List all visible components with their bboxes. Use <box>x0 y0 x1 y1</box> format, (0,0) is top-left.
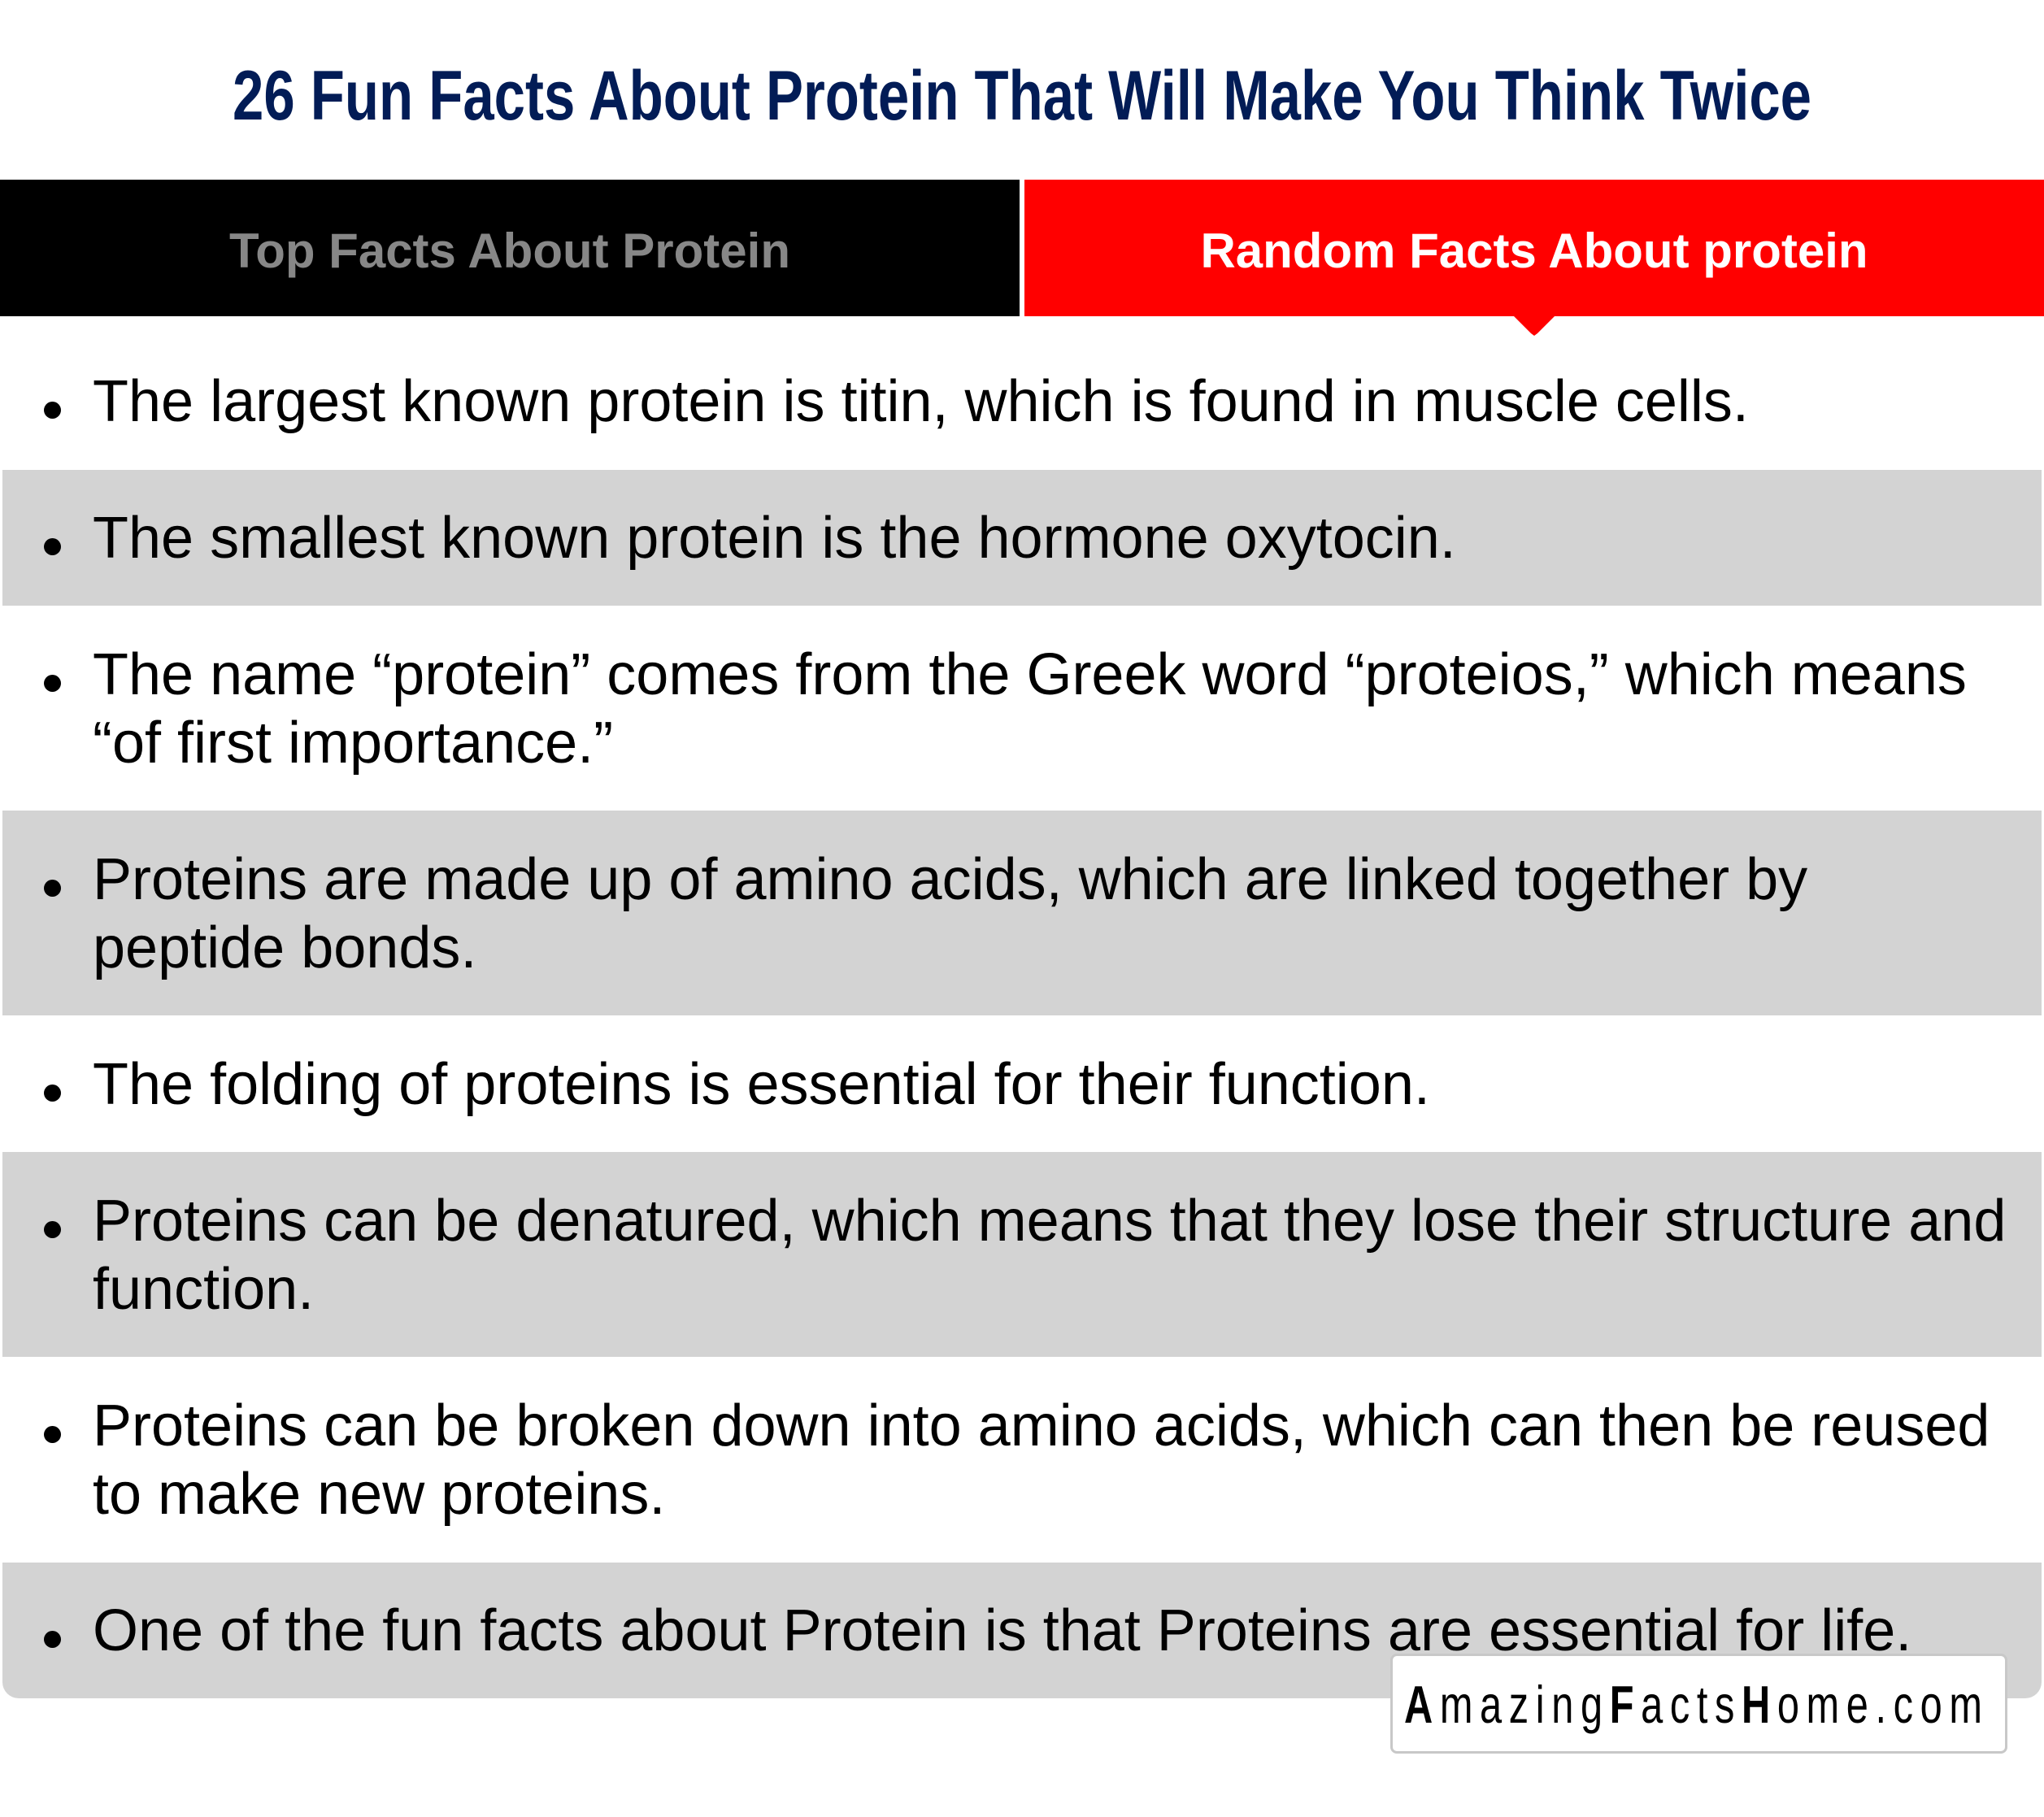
fact row 6: Proteins can be denatured, which means that they lose their structure and <box>93 1189 2006 1254</box>
fact row 6 <box>2 1152 2042 1357</box>
fact row 7: Proteins can be broken down into amino acids, which can then be reused <box>93 1393 1990 1458</box>
fact row 8: One of the fun facts about Protein is that Proteins are essential for life. <box>93 1598 1911 1663</box>
fact row 4: Proteins are made up of amino acids, which are linked together by <box>93 847 1807 912</box>
fact row 7 <box>44 1393 1990 1527</box>
fact row 3 <box>44 642 1967 776</box>
fact row 6: function. <box>93 1257 314 1322</box>
watermark badge <box>1390 1654 2007 1754</box>
fact row 2: The smallest known protein is the hormone oxytocin. <box>93 506 1456 571</box>
fact row 3: The name “protein” comes from the Greek word “proteios,” which means <box>93 642 1967 707</box>
fact row 5: The folding of proteins is essential for their function. <box>93 1052 1430 1117</box>
tab: top facts: Top Facts About Protein <box>229 224 790 278</box>
fact row 8 <box>2 1563 2042 1697</box>
fact row 3: “of first importance.” <box>93 711 613 776</box>
tab: random facts <box>1024 180 2044 316</box>
watermark text: AmazingFactsHome.com <box>1404 1676 1990 1735</box>
fact row 4: peptide bonds. <box>93 915 476 980</box>
fact row 1: The largest known protein is titin, which is found in muscle cells. <box>93 369 1749 434</box>
icon: active tab pointer <box>1514 316 1555 336</box>
tab: top facts <box>0 180 1020 316</box>
fact row 4 <box>2 811 2042 1015</box>
fact row 2 <box>2 470 2042 606</box>
tab: random facts: Random Facts About protein <box>1200 224 1868 278</box>
fact row 7: to make new proteins. <box>93 1462 665 1527</box>
